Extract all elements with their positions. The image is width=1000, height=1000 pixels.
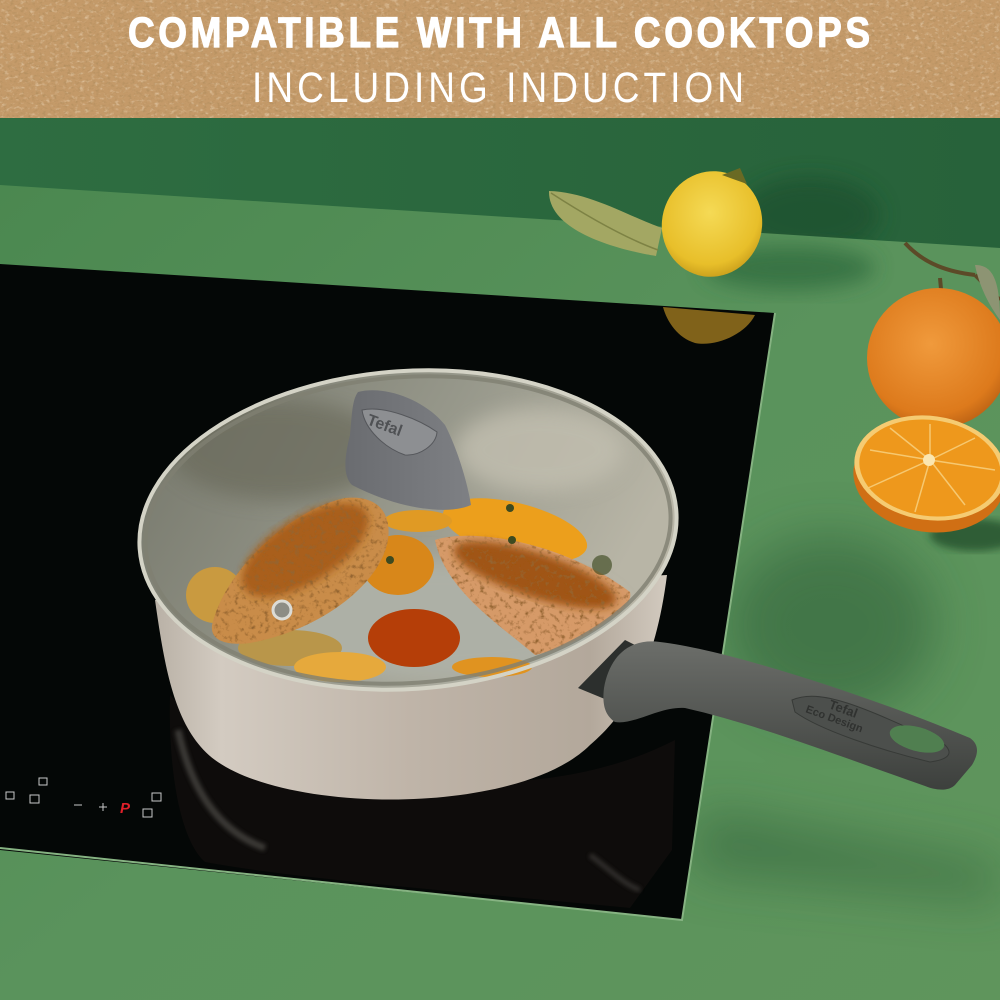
power level indicator: P (120, 800, 131, 817)
food: orange slices (186, 486, 593, 682)
lid knob (345, 390, 471, 510)
icon: lemon with leaf (549, 160, 774, 288)
shadow of lemon on wall (740, 177, 880, 253)
pan interior (141, 372, 675, 688)
food: thyme (386, 504, 612, 575)
steam vent (273, 601, 291, 619)
cooktop (0, 264, 775, 920)
icon: whole orange (867, 243, 1000, 428)
hanging hole (887, 720, 947, 758)
food: chicken left (212, 485, 389, 644)
burner reflection (170, 695, 675, 908)
control panel icons (6, 778, 161, 817)
title: COMPATIBLE WITH ALL COOKTOPS (128, 10, 870, 57)
thermo-spot indicator (368, 609, 460, 667)
banner background (0, 0, 1000, 118)
handle (578, 640, 977, 790)
lemon reflection (663, 307, 755, 344)
handle: Tefal (827, 697, 860, 721)
pan body (155, 575, 667, 800)
handle: Eco Design (804, 704, 865, 735)
glass lid rim (129, 353, 687, 707)
pan (129, 353, 977, 800)
shadow under pan on counter (690, 535, 1000, 900)
icon: orange half (846, 406, 1000, 551)
back wall (0, 118, 1000, 253)
lid knob: Tefal (365, 412, 404, 440)
subtitle: INCLUDING INDUCTION (252, 65, 744, 112)
handle label plate (792, 696, 949, 762)
shadow under lemon on counter (705, 246, 875, 290)
food: chicken right (435, 528, 630, 655)
